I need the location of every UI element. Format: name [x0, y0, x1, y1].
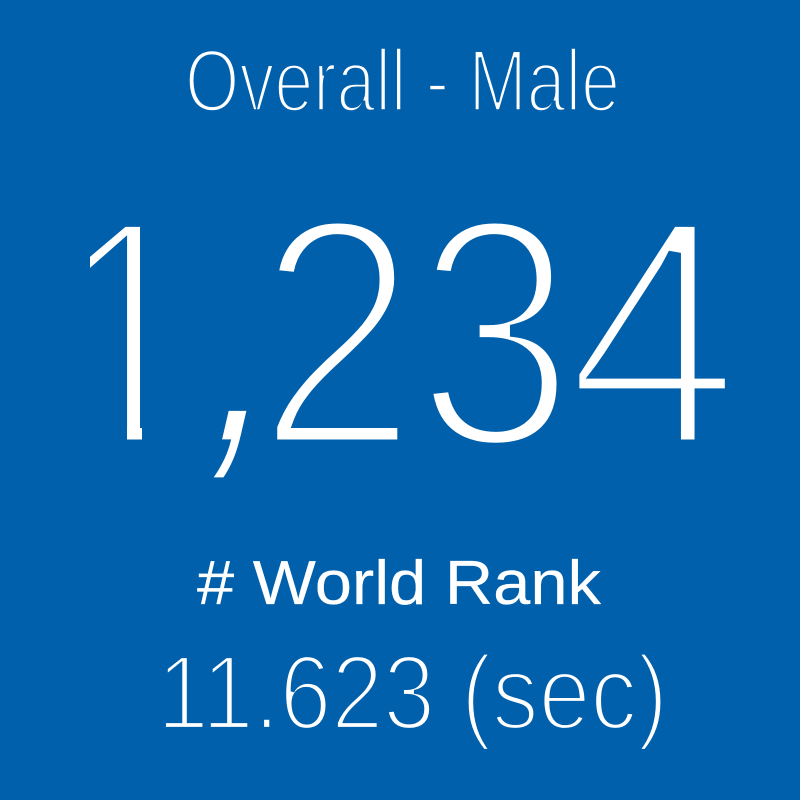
metric label: # World Rank [197, 549, 602, 618]
main number: , [186, 172, 322, 504]
time value: 11.623 (sec) [157, 634, 668, 752]
main number [90, 224, 725, 478]
main number: 2 [257, 150, 418, 516]
title: Overall - Male [185, 31, 620, 130]
main number: 1 [55, 150, 203, 516]
panel: stat card [90, 48, 725, 749]
main number: 3 [416, 150, 575, 516]
main number: 4 [566, 149, 740, 516]
